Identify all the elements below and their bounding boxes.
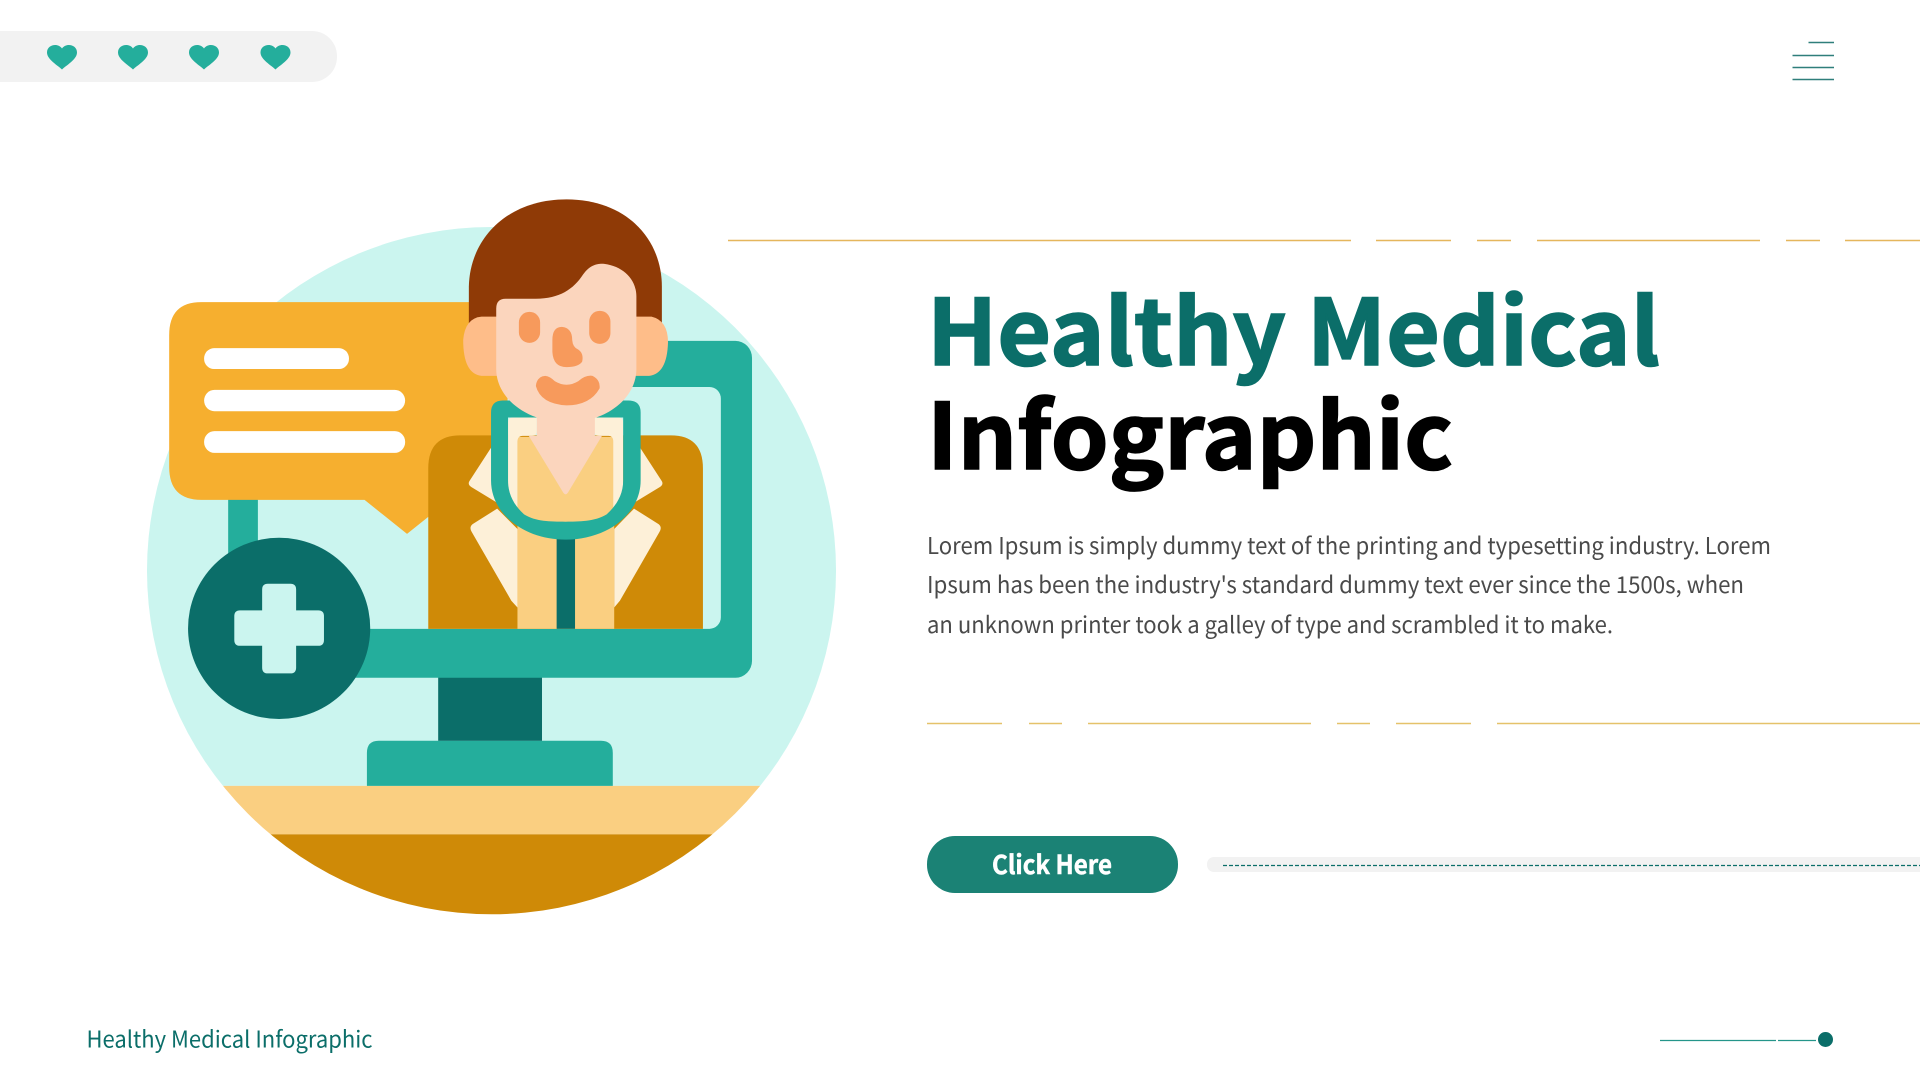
face	[496, 264, 636, 422]
body paragraph	[927, 527, 1771, 640]
heart rating bar	[0, 31, 337, 82]
doctor figure	[428, 199, 703, 629]
background circle with desk	[147, 227, 836, 914]
tie	[557, 536, 575, 629]
shirt	[517, 437, 614, 629]
button: click here: Click Here	[992, 845, 1112, 882]
monitor base	[367, 741, 613, 786]
body paragraph: an unknown printer took a galley of type and scrambled it to make.	[927, 606, 1613, 640]
monitor screen	[258, 387, 721, 629]
title: Infographic	[927, 364, 1453, 496]
icon: cross	[234, 584, 324, 673]
body paragraph: Lorem Ipsum is simply dummy text of the printing and typesetting industry. Lorem	[927, 527, 1771, 561]
icon: menu lines	[1792, 42, 1834, 80]
icon: heart 1	[47, 45, 77, 70]
jacket	[428, 435, 703, 629]
hair	[469, 199, 662, 323]
footer title: Healthy Medical Infographic	[86, 1020, 373, 1054]
ears	[463, 317, 668, 376]
illustration: online doctor on monitor	[130, 199, 866, 931]
monitor frame	[228, 341, 752, 678]
icon: heart 2	[118, 45, 148, 70]
dashed progress track	[1207, 857, 1920, 872]
top gold dashed divider	[728, 240, 1920, 242]
medical cross badge	[188, 538, 370, 719]
lapels	[469, 444, 662, 607]
monitor neck	[438, 674, 542, 741]
title	[927, 260, 1660, 496]
icon: heart 3	[189, 45, 219, 70]
neck	[529, 408, 602, 494]
bubble text lines	[204, 348, 405, 453]
stethoscope	[491, 401, 641, 540]
icon: heart 4	[260, 45, 290, 70]
eyes, nose and mouth	[519, 311, 610, 405]
button: click here	[927, 836, 1178, 893]
footer slider indicator	[1660, 1032, 1833, 1047]
lower gold dashed divider	[927, 722, 1920, 724]
speech bubble	[169, 302, 508, 534]
title: Healthy Medical	[927, 260, 1660, 392]
collar	[508, 417, 623, 510]
body paragraph: Ipsum has been the industry's standard dummy text ever since the 1500s, when	[927, 566, 1744, 600]
